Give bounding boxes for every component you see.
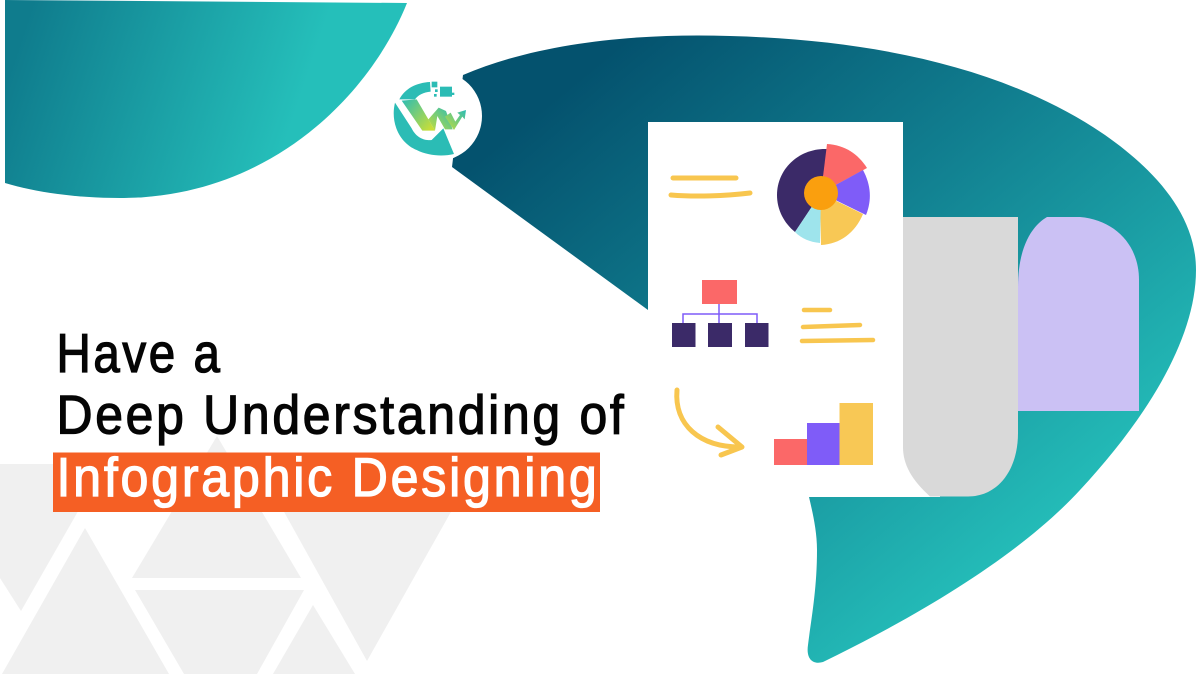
title: Infographic Designing	[56, 446, 600, 508]
title	[53, 322, 626, 512]
org chart	[672, 280, 768, 347]
lavender scroll end	[1018, 217, 1139, 411]
white logo circle	[392, 71, 482, 161]
title: Deep Understanding of	[56, 384, 626, 446]
background triangle pattern	[0, 436, 452, 674]
text lines middle	[802, 310, 873, 341]
title: Have a	[56, 322, 222, 384]
text lines top	[671, 178, 750, 196]
curved arrow	[677, 390, 742, 455]
grey paper scroll	[903, 217, 1018, 496]
logo icon	[394, 82, 466, 155]
orange highlight banner	[53, 452, 600, 512]
pie chart	[777, 144, 870, 245]
bar chart	[774, 403, 873, 465]
large teal speech-bubble shape	[452, 35, 1196, 663]
white document page	[648, 122, 903, 497]
white page corner behind scroll	[900, 430, 940, 497]
top-left corner teal shape	[5, 0, 407, 198]
